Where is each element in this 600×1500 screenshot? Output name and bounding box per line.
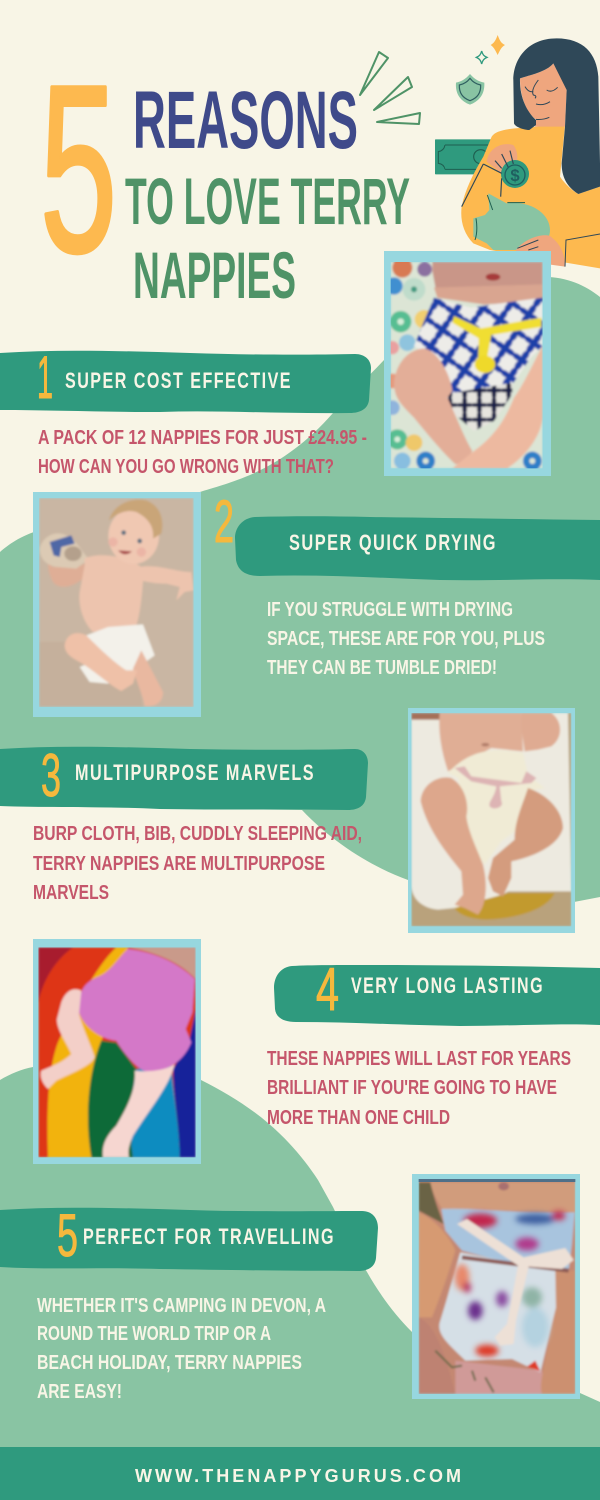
title line: reasons: REASONS [133, 75, 358, 166]
icon: orange star [491, 35, 505, 55]
footer [0, 1447, 600, 1500]
text block: reason 5: WHETHER IT'S CAMPING IN DEVON, A [37, 1295, 326, 1317]
panel: reason 5 photo [412, 1174, 580, 1399]
panel: reason 2 photo [33, 492, 201, 717]
text block: reason 3: MARVELS [33, 882, 109, 904]
panel: reason 3 photo [408, 708, 575, 933]
numeral 3: 3 [41, 742, 61, 809]
text block: reason 2: IF YOU STRUGGLE WITH DRYING [267, 599, 513, 621]
woman face lines [525, 80, 558, 119]
text block: reason 5: ARE EASY! [37, 1381, 122, 1403]
text block: reason 5: ROUND THE WORLD TRIP OR A [37, 1323, 271, 1345]
text block: reason 1 [38, 427, 367, 478]
text block: reason 3: BURP CLOTH, BIB, CUDDLY SLEEPING AID, [33, 823, 362, 845]
woman hair [513, 38, 600, 194]
band: reason 3 heading [0, 742, 368, 810]
band: reason 4 heading [274, 956, 600, 1026]
heading text: SUPER COST EFFECTIVE [65, 368, 292, 393]
background blob: upper green [0, 277, 600, 902]
text block: reason 4 [267, 1048, 571, 1129]
numeral 4: 4 [316, 956, 339, 1023]
title line: nappies: NAPPIES [133, 238, 296, 312]
illustration: woman saving money [435, 35, 600, 268]
title [40, 37, 410, 312]
text block: reason 2 [267, 599, 545, 679]
icon: banknote [435, 139, 495, 174]
band: reason 2 heading [235, 516, 600, 580]
website address: WWW.THENAPPYGURUS.COM [135, 1466, 465, 1486]
heading text: PERFECT FOR TRAVELLING [83, 1224, 335, 1249]
heading text: SUPER QUICK DRYING [289, 530, 497, 555]
text block: reason 5 [37, 1295, 326, 1403]
band: reason 5 heading [0, 1202, 378, 1271]
numeral 5: 5 [57, 1202, 78, 1269]
text block: reason 3: TERRY NAPPIES ARE MULTIPURPOSE [33, 853, 325, 875]
icon: shield [456, 74, 484, 105]
text block: reason 3 [33, 823, 362, 904]
hand and coin [462, 144, 529, 207]
hand and coin: $ [510, 166, 520, 185]
heading text: MULTIPURPOSE MARVELS [75, 760, 315, 785]
icon: outline star [476, 51, 487, 64]
text block: reason 2: THEY CAN BE TUMBLE DRIED! [267, 657, 497, 679]
piggy bank [473, 193, 550, 250]
band: reason 1 heading: 1 [37, 344, 53, 411]
panel: reason 4 photo [33, 939, 201, 1164]
big numeral five: 5 [40, 37, 117, 302]
text block: reason 4: MORE THAN ONE CHILD [267, 1107, 450, 1129]
woman body [461, 125, 600, 268]
band: reason 1 heading [0, 344, 371, 413]
lower hand [516, 234, 600, 267]
woman neck and face [520, 63, 567, 127]
text block: reason 1: HOW CAN YOU GO WRONG WITH THAT? [38, 456, 334, 478]
background blob: lower green [0, 1067, 600, 1450]
numeral 2: 2 [214, 488, 234, 555]
text block: reason 1: A PACK OF 12 NAPPIES FOR JUST £24.95 - [38, 427, 367, 449]
icon: sparkle lines [360, 52, 420, 124]
text block: reason 5: BEACH HOLIDAY, TERRY NAPPIES [37, 1352, 302, 1374]
panel: reason 1 photo [384, 251, 551, 476]
